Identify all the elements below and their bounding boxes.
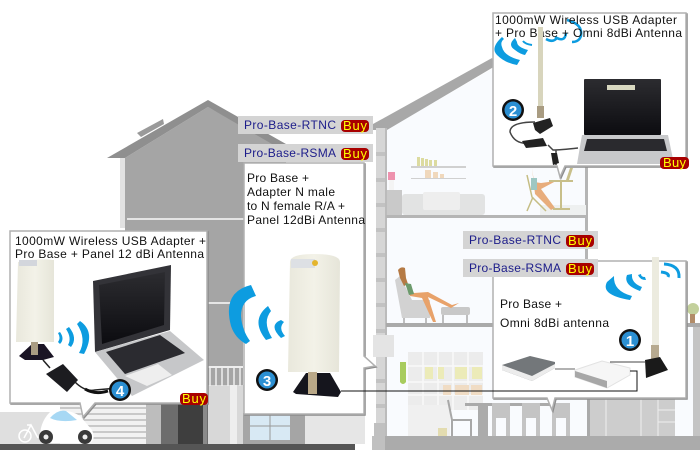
shelving and dining: [400, 303, 699, 436]
label pair: right: Buy: [568, 233, 592, 248]
panel 1: Pro Base with omni antenna: Pro Base +: [500, 297, 562, 311]
panel 4: USB adapter with panel antenna: 1000mW Wireless USB Adapter +: [15, 234, 206, 248]
label pair: right: Buy: [568, 261, 592, 276]
right house: [372, 58, 700, 450]
ground: [0, 436, 700, 450]
car and bicycle: [19, 411, 94, 444]
panel 2: USB adapter with omni antenna: Buy: [663, 155, 686, 170]
label pair: upper left: Pro-Base-RSMA: [244, 146, 336, 160]
panel 3: panel antenna: Adapter N male: [247, 185, 335, 199]
panel 2: USB adapter with omni antenna: [493, 13, 689, 178]
panel 2: USB adapter with omni antenna: 2: [509, 103, 517, 120]
label pair: right: Pro-Base-RSMA: [469, 261, 561, 275]
panel 1: Pro Base with omni antenna: 1: [626, 333, 634, 350]
panel 1: Pro Base with omni antenna: Omni 8dBi antenna: [500, 316, 609, 330]
panel 1: Pro Base with omni antenna: [492, 257, 687, 411]
panel 4: USB adapter with panel antenna: 4: [116, 383, 125, 400]
panel 2: USB adapter with omni antenna: + Pro Base + Omni 8dBi Antenna: [495, 26, 682, 40]
cable between devices: [341, 371, 637, 391]
panel 3: panel antenna: Panel 12dBi Antenna: [247, 213, 365, 227]
label pair: upper left: [238, 116, 373, 162]
woman on armchair: [395, 267, 470, 323]
furniture: upper bedroom: [387, 157, 586, 215]
panel 3: panel antenna: [229, 163, 376, 415]
panel 4: USB adapter with panel antenna: Buy: [182, 391, 206, 406]
panel 3: panel antenna: Pro Base +: [247, 171, 309, 185]
panel 2: USB adapter with omni antenna: 1000mW Wireless USB Adapter: [495, 13, 677, 27]
panel 4: USB adapter with panel antenna: Pro Base + Panel 12 dBi Antenna: [15, 247, 204, 261]
label pair: upper left: Buy: [343, 146, 368, 161]
label pair: right: [463, 231, 598, 277]
panel 3: panel antenna: 3: [263, 373, 271, 390]
label pair: upper left: Pro-Base-RTNC: [244, 118, 336, 132]
label pair: right: Pro-Base-RTNC: [469, 233, 561, 247]
panel 4: USB adapter with panel antenna: [10, 231, 208, 418]
woman at desk: [527, 168, 573, 211]
left house: [0, 100, 365, 444]
label pair: upper left: Buy: [343, 118, 368, 133]
panel 3: panel antenna: to N female R/A +: [247, 199, 345, 213]
